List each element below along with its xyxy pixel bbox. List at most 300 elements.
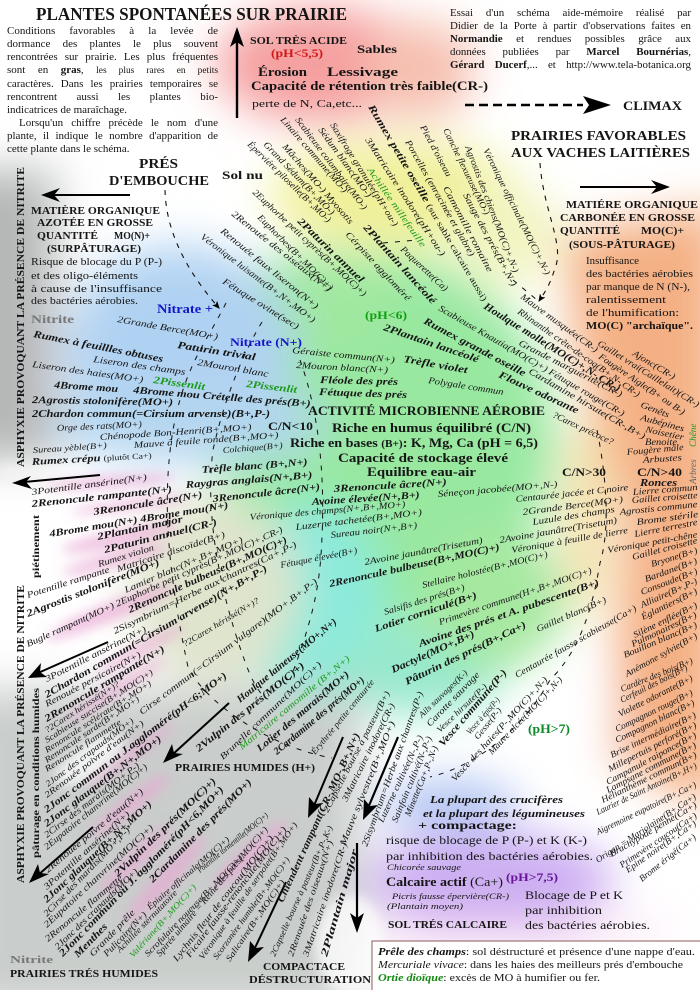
central text: microbial activity: ACTIVITÉ MICROBIENNE AÉROBIE [308,403,545,418]
plants: right column hedgerow list: Campanule raiponce(B+) [604,730,698,787]
plants: nitrate zone: Mauve à feuile ronde(B+,MO+) [132,430,279,450]
central text: microbial activity: Riche en bases (B+): K, Mg, Ca (pH = 6,5) [290,436,538,450]
plants: right column hedgerow list: Alliaire(B+,P-) [638,576,699,610]
plants: left grazing zone: Trèfle blanc (B+,N+) [201,457,308,476]
plants: right column hedgerow list: Consoude(B+) [639,566,699,597]
plants: compaction fan: Érythrée petite centaurée [308,677,376,757]
plants: humid meadow fan: Achillée sternutatoire [113,888,179,955]
heading: very acid soil [250,35,488,110]
plants: left grazing zone: 4Brome mou(N+) 4Brome mou(N+) [48,500,229,540]
plants: nitrate zone: 2Pissenlit [151,375,207,393]
plants: humid meadow fan: 2Renouée poivre d'eau(N+) [42,718,146,800]
plants: left grazing zone: 2Sisymbrium=Herbe aux chantres(Ca+,P-) [112,540,298,636]
plants: compaction fan: Lotier des marais(MO+) [254,669,352,755]
plants: nitrate zone: 2Agrostis stolonifère(MO+) [31,395,173,408]
credits text: Didier de la Porte à partir d'observations faites en [450,20,691,32]
plants: compaction fan: Mauve sylvestre(B+,MO+) [337,720,397,848]
heading: favourable meadows: AUX VACHES LAITIÈRES [511,144,690,161]
plants: humid meadow fan: Nitrite [10,954,53,966]
central text: microbial activity: Riche en humus équilibré (C/N) [332,421,531,435]
plants: nitrate zone: Fléole des prés [319,375,398,388]
plants: nitrate zone: Paturin trivial [177,340,256,363]
plants: nitrate zone: Géraiste commun(N+) [292,345,395,365]
plants: top fan, acid soils: 3Matricaire inodore(pH+ou-) [363,135,447,258]
plants: right column hedgerow list: Brome stérile [636,509,699,527]
plants: central green zone: Centaurée fausse scabieuse(Ca+) [513,603,638,680]
plants: right column hedgerow list: Brome érigé(Ca+) [637,832,698,884]
plants: upper right fan: Noisetier [643,424,685,442]
plants: humid meadow fan: 2Cardamine des prés(MO+) [146,777,254,886]
central text: microbial activity: C/N<10 [268,419,313,433]
block: nitrogen organic matter: à cause de l'insuffisance [31,283,162,295]
plants: central green zone: Primevère commune(H+,B+,MO(C)+) [436,565,593,627]
block: calcareous soil: La plupart des crucifères [429,795,563,806]
plants: compaction fan [193,617,440,986]
plants: top fan, acid soils: Éperviére piloselle(B+,MO-) [245,139,333,224]
plants: top fan, acid soils: Fétuque ovine(sec) [220,276,301,331]
plants: left grazing zone: ?2Carex hérissé(N+)? [181,595,261,649]
plants: humid meadow fan: Scabieuse succise(B+,MO(C)+) [43,667,155,745]
plants: central green zone: Ails sauvages(K-) [416,668,470,720]
heading: very acid soil: (pH<5,5) [271,48,323,60]
plants: left grazing zone: 3Renoncule âcre(N+) [211,482,321,505]
plants: compaction fan: 2Sisymbrium=Herbe aux chantres(P-) [359,690,425,848]
central text: microbial activity: C/N>30 [562,465,606,479]
plants: nitrate zone: Nitrate + [157,301,213,316]
block: carbon organic matter: Insuffisance [586,255,639,267]
plants: left grazing zone: 2Renoncule rampante(N+) [30,484,173,510]
arrow: sisymbrium [363,737,398,820]
plants: top fan, acid soils: 2Renouée des oiseaux(N+) [230,209,333,294]
plants: right column hedgerow list: Cardère des bois(B+) [619,656,694,694]
plants: top fan, acid soils: Mâches(MO-) Myosotis [280,141,356,226]
plants: top fan, acid soils: Linaire commune(MO-) [278,114,350,195]
plants: central green zone: Salsifis des prés(B+) [383,582,466,617]
plants: central green zone: Luzule des champs [531,504,616,527]
plants: top fan, acid soils: 2Euphorbe petit cyprès(B+,MO(C)+) [251,187,369,298]
intro text: cette plante dans le schéma. [7,143,129,155]
plants: left grazing zone: 2Chardon commun(=Cirsium arvense)(N+,B+,P-) [42,564,269,701]
plants: central green zone: Gaillet blanc(B+) [535,595,608,634]
plants: top fan, acid soils: Cérpiste aggloméré [344,230,414,304]
plants: upper right fan: Aubépines [638,412,686,434]
plants: central green zone: Stellaire holostée(B+,MO(C)+) [421,549,549,590]
plants: compaction fan: 2Renouée des oiseaux(N+) [285,839,335,958]
plants: top fan, acid soils: 2Paturin annuel [294,215,366,285]
plants: left grazing zone: Lamier blanc(N+,B+,MO+) [122,535,244,595]
heading: very acid soil: Sables [357,44,398,56]
block: calcareous soil: + compactage: [418,818,517,832]
plants: top fan, acid soils: Camomille romaine [441,184,495,274]
plants: top fan, acid soils: Paquerette(Ca) [398,243,450,293]
block: nitrogen organic matter: Risque de blocage du P (P-) [31,256,162,268]
plants: upper right fan: Ronces [639,478,677,489]
dashed arrow: prairies favorables to mauve musquée [539,163,558,301]
block: carbon organic matter: MO(C) "archaïque". [586,321,693,332]
plants: central green zone: Carotte sauvage [424,670,481,728]
plants: humid meadow fan: Scrofulaire noueuse(B+,MO(C)+) [142,853,245,958]
plants: top fan, acid soils: Renouée faux liseron(N+) [218,225,321,311]
plants: nitrate zone: Liseron des champs [91,354,187,377]
plants: nitrate zone: Nitrate (N+) [230,337,302,349]
plants: left grazing zone: Rumex violon [96,542,155,569]
plants: humid meadow fan: 2Cirse des marais(MO+,P-) [42,761,141,840]
plants: upper right fan: Benoite [645,437,677,447]
plants: left grazing zone: Avoine élevée(N+,B+) [310,490,420,508]
plants: upper right fan: Arbres [688,459,698,485]
plants: right column hedgerow list [594,482,699,884]
block: calcareous soil: Picris fausse épervière(CR-) [391,891,509,901]
plants: central green zone: Gesse(P-) [472,705,504,741]
plants: top fan, acid soils: Porcelles (enracinée et glabre) [403,137,477,258]
plants: humid meadow fan: 2Jonc glauque(B+,N+,MO+) [41,799,154,906]
callout box: indicator plants: Mercuriale vivace : dans les haies des meilleurs prés d'embouche [377,960,683,971]
plants: central green zone [327,479,638,783]
plants: compaction fan: 2Vulpin des prés(MO(C)+) [193,661,307,755]
plants: right column hedgerow list: Anémone sylvie(B+) [622,631,699,679]
plants: humid meadow fan: Valériane(B+,MO(C)+) [127,882,198,959]
heading: prés d'embouche: D'EMBOUCHE [109,174,209,189]
plants: compaction fan: Luzerne cultivée(N-,P-) [375,734,425,825]
block: carbon organic matter: CARBONÉE EN GROSSE [560,212,695,224]
block: calcareous soil: SOL TRÉS CALCAIRE [388,919,507,931]
plants: upper right fan: Scabieuse Knautia(MO(C)+) Fétuque rouge(CR-) [437,303,626,418]
arrow: chiendent [308,737,343,818]
block: nitrogen organic matter [31,205,162,326]
plants: nitrate zone: 2Pissenlit [244,379,299,396]
plants: humid meadow fan: Renoncule sarde(B+,MO+) [42,694,141,765]
plants: humid meadow fan: 2Vulpin des prés(MO(C)+) [112,776,219,880]
plants: right column hedgerow list: Bryone(B+) [650,545,698,569]
plants: central green zone: Véronique à feuille de lierre [511,525,629,555]
plants: right column hedgerow list: Compagnon blanc(B+) [613,698,696,745]
plants: left grazing zone: Véronique des champs(N+,B+,MO+) [249,499,406,522]
central text: microbial activity: Capacité de stockage élevé [338,451,509,465]
plants: right column hedgerow list: Bardane(B+) [643,556,698,584]
callout box: indicator plants: Ortie dioïque : excès de MO à humifier ou fer. [378,973,600,984]
plants: right column hedgerow list: Lierre commun [631,482,698,497]
heading: favourable meadows: PRAIRIES FAVORABLES [511,129,686,144]
plants: upper right fan: 2Plantain lancéolé [381,322,481,366]
plants: upper right fan: Houlque molle(MO(C)+,N-,CR-) [480,301,622,395]
plants: top fan, acid soils: Canche flexueuse(MO-) [441,126,492,216]
block: calcareous soil: par inhibition [525,903,602,917]
intro text [7,25,218,155]
plants: humid meadow fan: 2Eupatoire chanvrine(MO(C)+) [42,762,149,852]
block: calcareous soil: Chicorée sauvage [387,862,461,872]
dashed zone boundaries [167,240,606,777]
plants: top fan, acid soils [199,102,552,331]
plants: humid meadow fan: Véronique à feuille de serpolet(B+,MO+) [196,820,299,961]
heading: favourable meadows [511,129,690,161]
plants: right column hedgerow list: Églantiers(B+) [639,586,699,622]
vertical labels: ASPHYXIE PROVOQUANT LA PRÉSENCE DE NITRITE [15,167,27,467]
plants: top fan, acid soils: Euphorbes(B+,MO(C)+) [255,212,335,292]
plants: top fan, acid soils: Rumex petite oseille (sur sable calcaire aussi) [365,102,490,303]
plants: humid meadow fan: Épiaire officinale(MO(C)+) [144,834,231,912]
plants: top fan, acid soils: Sauge des prés(B+,N-) [461,191,519,288]
plants: upper right fan: Grande marguerite(CR-) [517,338,624,399]
plants: top fan, acid soils: Scabieuse colombaire(MO-) [293,115,369,211]
plants: left grazing zone: 2Plantain major [95,514,185,543]
plants: upper right fan: Flouve odorante [496,369,581,417]
intro text: rencontrent aussi les plantes bio- [7,91,218,103]
plants: right column hedgerow list: Cerfeuil des bois(B+) [618,663,689,705]
plants: upper right fan [381,291,700,489]
plants: left grazing zone: 2Renoncule bulbeuse(B+,MO(C)+) [126,535,289,616]
plants: humid meadow fan: Pulicaire(N+) [100,910,149,959]
heading: climax: CLIMAX [623,98,683,113]
heading: very acid soil: Lessivage [327,65,399,79]
plants: compaction fan: COMPACTACE [263,962,345,973]
block: nitrogen organic matter: Nitrite [31,312,75,326]
plants: left grazing zone: Renouée persicaire(N+) [42,650,142,709]
plants: right column hedgerow list: Millepertuis perforé(B+) [605,720,698,774]
plants: right column hedgerow list: Origan = Marjolaine(B+,Ca+) [594,792,698,865]
plants: central green zone: Vesce à épis(P-) [464,695,502,736]
plants: left grazing zone: 3Potentille ansérine(N+) [42,624,148,684]
plants: top fan, acid soils: Véronique officinale(MO(C)+,N-) [481,146,552,276]
plants: humid meadow fan: 2Jonc commun ou J.aggloméré(pH<6;MO+) [41,671,229,816]
plants: right column hedgerow list: Lierre terrestre [632,517,698,539]
plants: right column hedgerow list: Hélianthème commun(B+) [599,750,698,805]
block: carbon organic matter: ralentissement [586,294,666,306]
plants: nitrate zone [30,301,407,468]
intro text: caractères. Dans les prairies temporaires se [7,78,218,90]
plants: right column hedgerow list: Violette odorante(B+) [616,673,694,719]
plants: upper right fan: Polygale commun [427,375,505,397]
intro text: sont en gras, les plus rares en petits [7,64,218,76]
block: carbon organic matter: des bactéries aérobies [586,268,693,280]
plants: central green zone: Pâturin des prés(B+,Ca+) [404,620,528,688]
plants: top fan, acid soils: Pied d'oiseau [418,122,454,179]
arrow: asphyxia left humid 2 [29,827,93,883]
plants: upper right fan: Trèfle violet [402,354,470,377]
plants: top fan, acid soils: 2Plantain lancéolé [360,222,438,307]
block: nitrogen organic matter: (SURPÂTURAGE) [47,243,142,255]
plants: nitrate zone: Rumex crépu (plutôt Ca+) [30,450,152,468]
block: nitrogen organic matter: MO(N)+ [114,231,150,242]
plants: nitrate zone: 2Chardon commun(=Cirsium arvense)(B+,P-) [31,409,270,420]
central text: microbial activity [268,308,606,479]
plants: nitrate zone: Sureau yèble(B+) [32,440,107,455]
plants: left grazing zone: Potentille rampante [24,564,111,600]
plants: nitrate zone: 2Mouron blanc [197,357,269,379]
vertical labels: pâturage en conditions humides [32,688,42,858]
intro text: dormance des plantes le plus souvent [7,38,218,50]
plants: compaction fan: DÉSTRUCTURATION [249,974,371,986]
arrow: down compaction [350,843,364,933]
plants: nitrate zone: 4Brome mou [53,380,119,395]
plants: humid meadow fan: Grande prêle [87,908,137,958]
block: calcareous soil: (pH>7,5) [506,872,558,884]
plants: compaction fan: Matricaire camomille (B+,N+) [236,654,352,752]
plants: left grazing zone: 2Agrostis stolonifère(MO+) [24,558,161,620]
central text: microbial activity: (pH<6) [365,308,407,322]
plants: compaction fan: 2Capselle bourse à pasteur(B+) [321,689,392,814]
plants: right column hedgerow list: Véronique petit-chêne [607,529,698,555]
block: calcareous soil: risque de blocage de P (P-) et K (K-) [386,833,587,847]
intro text: Conditions favorables à la levée de [7,25,218,37]
plants: top fan, acid soils: Grand Sédum(B+,MO-) [262,139,337,217]
block: calcareous soil: par inhibition des bactéries aérobies. [386,849,593,863]
arrow: asphyxia left humid 1 [28,642,108,678]
plants: right column hedgerow list: Gaillet croisette [631,490,698,505]
plants: compaction fan: 2Cardamine des prés(MO+) [271,675,367,758]
plants: nitrate zone: Colchique(B+) [222,440,283,455]
plants: humid meadow fan: 2Jonc des crapauds(MO+) [43,716,136,789]
plants: upper right fan: Mauve musquée(CR-) [518,291,600,354]
block: carbon organic matter: MATIÉRE ORGANIQUE [566,199,698,211]
block: nitrogen organic matter: et des oligo-éléments [31,270,138,282]
plants: left grazing zone: Matricaire discoïde(B+) [114,529,226,574]
plants: right column hedgerow list: Brise intermédiaire(B+) [609,710,698,760]
plants: upper right fan: Ajonc(CR-) [630,348,677,381]
block: nitrogen organic matter: des bactéries aérobies. [31,295,138,307]
plants: upper right fan: Genêts [639,400,671,420]
block: carbon organic matter: de l'humification: [586,307,679,319]
credits text: Essai d'un schéma aide-mémoire réalisé par [450,7,691,19]
heading: prés d'embouche: PRÉS [139,155,178,172]
plants: central green zone: Vesce des haies(P-,MO(C)+,N-) [449,675,550,783]
plants: humid meadow fan: 2Jonc glauque(B+,N+,MO+) [41,734,164,830]
heading: very acid soil: SOL TRÈS ACIDE [250,35,347,47]
plants: humid meadow fan: Ficaire fausse-renoncule(MO(C)+) [183,825,288,960]
plants: central green zone: Vesce hirsute(P-) [434,681,489,734]
block: calcareous soil: Calcaire actif (Ca+) [386,875,503,889]
intro text: Lorsqu'un chiffre précède le nom d'une [19,117,218,129]
plants: humid meadow fan: 2Jonc commun ou J. aggloméré(pH<6,MO+) [56,785,226,960]
plants: top fan, acid soils: Véronique luisante(B+,N+,MO+) [199,232,317,324]
plants: left grazing zone: 2Renoncule rampante(N+) [42,644,167,725]
plants: right column hedgerow list: Pulmonaires(B+) [629,610,698,649]
arrow: compactage left [248,882,286,962]
plants: left grazing zone: 3Renoncule âcre(N+) [332,477,447,495]
plants: upper right fan: Gaillet vrai(Caillelait)(CR-) [596,338,700,409]
plants: top fan, acid soils: Saxifrage granulée(pH+ou-) [328,121,400,228]
credits text: Gérard Ducerf,... et http://www.tela-botanica.org [450,59,691,71]
plants: humid meadow fan: 2Renoncule flammette [43,873,124,944]
plants: humid meadow fan: 2Renouée poivre d'eau(N+) [43,787,145,875]
plants: left grazing zone: 2Paturin annuel(CR-) [102,517,218,556]
plants: humid meadow fan: Lychnis fleur de coucou(MO(C)+) [170,833,275,964]
plants: central green zone: 2Avoine jaunâtre(Trisetum) [499,515,618,545]
plants: right column hedgerow list: Lampsane commune(B+) [603,740,698,795]
callout box: indicator plants: Prêle des champs : sol déstructuré et présence d'une nappe d'eau. [378,947,695,958]
plants: humid meadow fan: 2Eupatoire chanvrine(MO(C)+) [42,823,155,929]
credits text [450,7,691,71]
plants: central green zone: 2Renoncule bulbeuse(B+,MO(C)+) [327,542,501,590]
plants: upper right fan: C/N>40 [637,465,682,479]
plants: right column hedgerow list: Épine noire(B+,Ca+) [623,818,698,875]
plants: right column hedgerow list: Agrostis commune [618,499,698,517]
plants: upper right fan: Rumex grande oseille [420,315,528,379]
dashed arrow: climax [465,96,611,114]
block: nitrogen organic matter: QUANTITÉ [37,230,98,242]
plants: compaction fan: Minette(Ca+,P-,N-) [402,744,440,819]
plants: central green zone: Vesce commune(P-) [437,668,510,749]
block: calcareous soil: des bactéries aérobies. [525,918,650,932]
plants: nitrate zone: Rumex à feuillles obtuses [31,329,164,365]
plants: left grazing zone: 3Renoncule âcre(N+) [92,490,203,518]
title: PLANTES SPONTANÉES SUR PRAIRIE [36,4,347,24]
plants: top fan, acid soils: Sédum blanc(MO-) [316,125,374,199]
plants: compaction fan: Sainfoin cultivé(N-,P-) [390,735,434,824]
plants: compaction fan: Brunelle commune(MO(C)+) [217,659,323,761]
dashed arrow: prés d'embouche to nitrate [165,190,219,308]
plants: humid meadow fan: Salicaire(B+,MO(C)+) [223,877,287,963]
block: nitrogen organic matter: MATIÈRE ORGANIQUE [31,205,160,217]
plants: left grazing zone: Luzerne tachetée(B+,MO+) [294,507,422,532]
plants: nitrate zone: 2Mouron blanc(N+) [296,360,388,375]
plants: nitrate zone: Chénopode Bon-Henri(B+,MO+) [99,422,252,442]
plants: humid meadow fan: Potentille tormentille(MO(C)+) [194,810,270,875]
plants: top fan, acid soils: Agrostis des chiens(MO(C)+,N-) [463,143,521,274]
block: carbon organic matter: QUANTITÉ [560,225,620,237]
plants: compaction fan: 2Plantain major [319,847,361,959]
plants: central green zone: 2Grande Berce(MO+) [522,494,623,517]
block: carbon organic matter: MO(C)+ [641,226,684,237]
plants: humid meadow fan: 3Potentille ansérine(N+) [41,809,132,892]
plants: humid meadow fan: 2Cirse des marais(MO+,P-) [41,825,132,918]
plants: humid meadow fan: 2Jonc des crapauds(MO+) [52,866,140,951]
plants: nitrate zone: 2Grande Berce(MO+) [117,314,219,342]
plants: humid meadow fan: Scorzonère humble(B+,MO(C)+) [211,855,292,961]
block: nitrogen organic matter: AZOTÉE EN GROSSE [37,217,153,229]
plants: humid meadow fan: Renoncule scélérate(B+,MO+) [42,678,153,755]
plants: nitrate zone: Fétuque des prés [318,387,407,401]
plants: nitrate zone: Orge des rats(MO+) [57,419,142,433]
intro text: plante, il indique le nombre d'apparition de [7,130,218,142]
plants: humid meadow fan: Spirée ulmaire = Reine des prés(MO(C)+) [154,825,270,958]
block: carbon organic matter [560,199,698,332]
heading: very acid soil: Capacité de rétention très faible(CR-) [251,79,488,93]
plants: upper right fan: Arbustes [641,452,683,465]
block: carbon organic matter: par manque de N (N-), [586,281,690,293]
arrow: asphyxia trampling [12,475,100,489]
vertical labels [15,167,42,883]
plants: left grazing zone: Bugle rampant(MO+) 2Euphorbe petit cyprès(B+,MO(C)+,CR-) [25,524,284,649]
plants: humid meadow fan: Renoncule flammette [42,717,123,774]
plants: nitrate zone: 4Brome mou Crételle des prés(B+) [132,385,311,410]
plants: right column hedgerow list: Brachypode penné(Ca+) [608,800,698,859]
plants: humid meadow fan: PRAIRIES TRÉS HUMIDES [10,968,158,980]
plants: central green zone: Lotier corniculé(B+) [372,590,478,635]
plants: left grazing zone: Sureau noir(N+,B+) [330,520,418,540]
heading: very acid soil: Érosion [258,65,307,79]
vertical labels: piétinement [32,514,42,578]
callout box: indicator plants [372,941,700,990]
block: calcareous soil: et la plupart des légumineuses [423,809,585,820]
plants: upper right fan: Cardamine hirsute(CR-,B+) [527,366,647,441]
plants: central green zone: Dactyle(MO+,B+) [389,629,476,676]
plants: central green zone: (pH>7) [528,721,570,736]
plants: central green zone: Centaurée jacée et C.noire [515,482,629,504]
plants: upper right fan: ?Carex précoce? [551,410,616,447]
arrow: up acid soil [230,27,244,118]
plants: left grazing zone: 3Potentille ansérine(N+) [30,472,147,497]
intro text: rencontrées sur prairie. Les plus fréquentes [7,51,218,63]
plants: humid meadow fan: PRAIRIES HUMIDES (H+) [175,763,316,774]
block: calcareous soil: Blocage de P et K [525,888,623,902]
block: calcareous soil: (Plantain moyen) [387,901,463,911]
plants: right column hedgerow list: Gaillet croisette [631,535,698,562]
plants: humid meadow fan: ?2Carex hérissé(N+)? [43,678,122,735]
plants: left grazing zone: Fétuque élevée(B+) [278,545,358,570]
arrow: left organic nitrogen [41,188,130,202]
plants: central green zone: Mauve alcée(MO(C)+,N-) [485,675,564,757]
credits text: données publiées par Marcel Bournérias, [450,46,691,58]
